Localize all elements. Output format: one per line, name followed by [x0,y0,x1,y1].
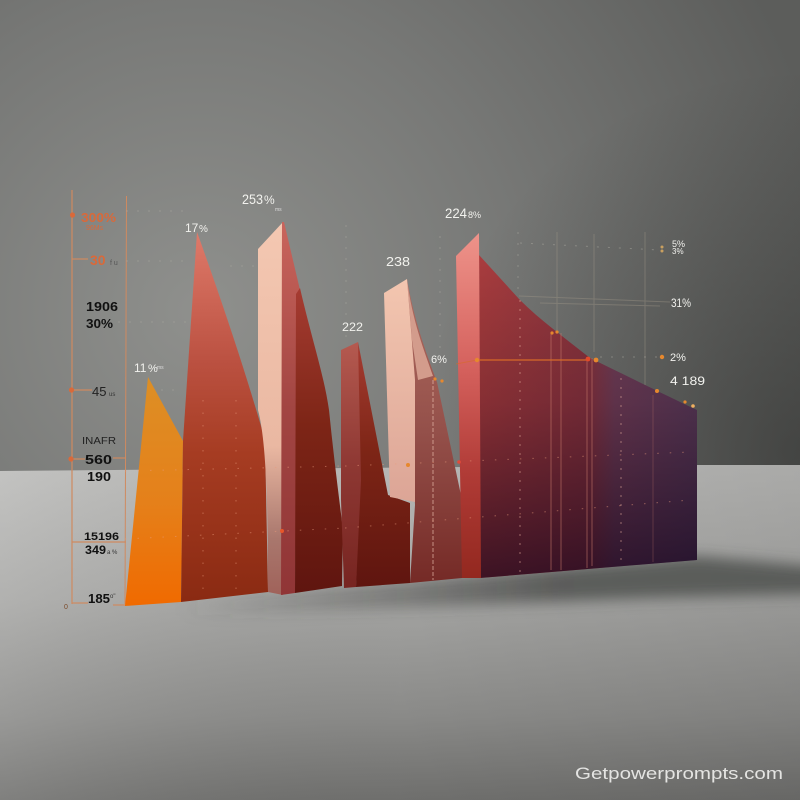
chart: red peak [181,232,268,602]
left axis labels: us [109,392,115,398]
chart: pink bar [456,233,481,578]
left axis labels: 30% [86,316,113,331]
peak value labels: % [199,224,208,235]
left axis labels: o" [110,594,115,600]
peak value labels: % [264,193,275,207]
axis markers [68,212,75,462]
label: INAFR: INAFR [82,436,116,447]
left axis labels: f u [110,260,118,267]
label: 30: 30 [90,252,106,268]
left axis labels: 190 [87,469,111,484]
chart: large purple area [479,255,697,578]
left axis labels [64,210,119,611]
peak value labels: ms [275,207,282,213]
label: 224%: 224 [445,205,467,221]
label: 17%: 17 [185,221,199,235]
chart: second pale bar [384,279,462,583]
peak value labels [134,191,705,388]
wall gridlines [118,211,660,390]
left axis labels: 349 [85,543,106,557]
label: 6%: 6% [431,354,447,366]
label: 31%: 31% [671,296,691,310]
label: 2%: 2% [670,352,686,364]
label: 185: 185 [88,591,110,606]
chart inner gridlines [125,300,690,600]
label: 4 189: 4 189 [670,374,705,388]
label: 238: 238 [386,254,410,269]
label: 300%: 300% [81,210,116,225]
left axis labels: a % [107,550,118,556]
peak value labels: 3% [672,247,684,256]
label: 11%: 11 [134,361,147,375]
chart: orange peak [125,377,183,606]
label: 15196 349: 15196 [84,531,119,543]
label: 45: 45 [92,384,106,399]
label: 1906 30%: 1906 [86,299,118,314]
peak value labels: 8% [468,210,481,220]
label: 222: 222 [342,320,363,334]
chart: central dark peak [341,342,410,588]
chart: pale bar [258,222,343,595]
label: 253%: 253 [242,191,263,207]
background wall [0,0,800,475]
floor [0,465,800,800]
watermark: Getpowerprompts.com [575,764,783,783]
left axis labels: 96Ms [86,225,104,232]
peak value labels: % [148,363,158,375]
left axis [68,190,126,605]
label: 560 190: 560 [85,452,112,467]
peak value labels: ms [157,365,164,371]
label: 0: 0 [64,604,68,611]
label: 5%: 5% [672,239,685,249]
data point markers [280,246,695,533]
